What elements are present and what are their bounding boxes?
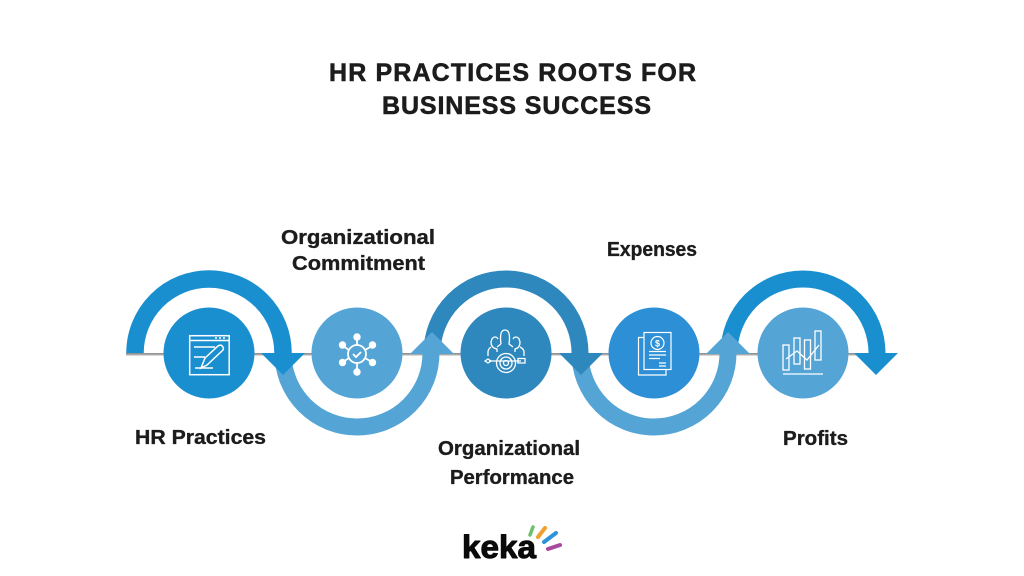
circle and icon: organizational commitment xyxy=(312,308,402,398)
label: Organizational Performance xyxy=(438,438,580,489)
circle and icon: HR practices xyxy=(164,308,254,398)
dollar sign: $ xyxy=(655,338,660,348)
label: Organizational Performance: Organizational xyxy=(438,438,580,460)
timeline baseline xyxy=(126,353,886,356)
title: BUSINESS SUCCESS xyxy=(382,92,651,120)
circle and icon: expenses xyxy=(608,308,700,398)
arrow 2: organizational commitment arc xyxy=(283,332,454,427)
circle and icon: organizational performance xyxy=(460,308,552,398)
title: HR PRACTICES ROOTS FOR xyxy=(329,59,696,87)
arrow 3: organizational performance arc xyxy=(432,279,603,375)
arrow 1: HR practices arc xyxy=(135,279,305,375)
label: Organizational Commitment xyxy=(281,227,435,275)
label: Organizational Commitment: Organizational xyxy=(281,227,435,249)
arrow 4: expenses arc xyxy=(580,332,750,427)
logo: keka: keka xyxy=(462,529,536,565)
label: Expenses: Expenses xyxy=(607,239,697,261)
circle and icon: profits xyxy=(758,308,848,398)
label: HR Practices: HR Practices xyxy=(135,427,266,449)
logo: keka xyxy=(462,527,560,565)
label: Organizational Commitment: Commitment xyxy=(292,253,425,275)
label: Profits: Profits xyxy=(783,428,848,450)
title xyxy=(329,59,696,120)
label: Organizational Performance: Performance xyxy=(450,467,574,489)
arrow 5: profits arc xyxy=(729,279,898,375)
